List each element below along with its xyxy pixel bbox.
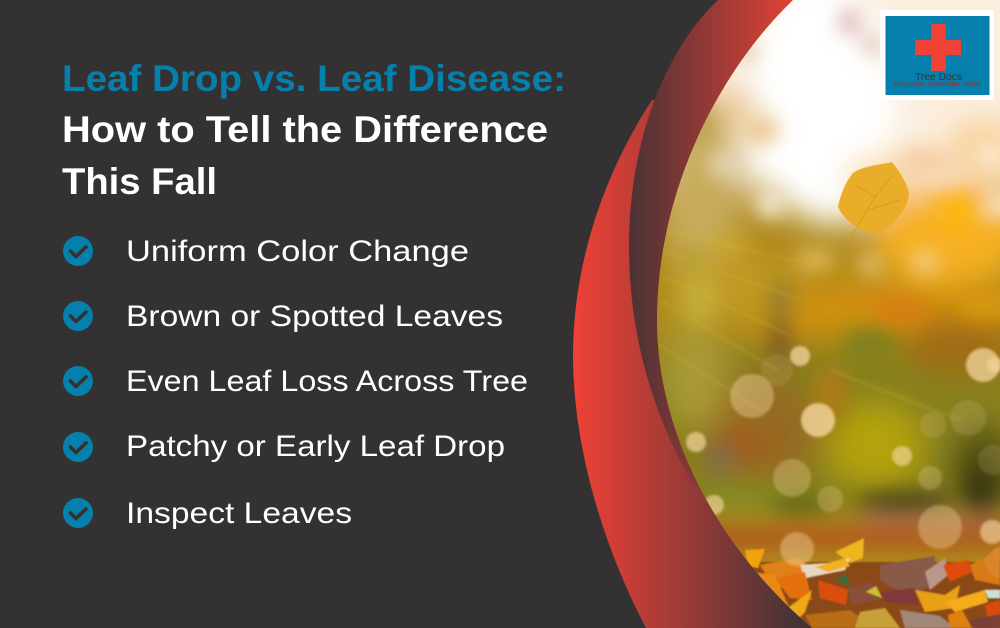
logo tagline: Diagnose. Prescribe. Treat. bbox=[894, 82, 981, 88]
title: This Fall bbox=[62, 161, 217, 202]
ground leaves bbox=[740, 538, 1000, 628]
item: Uniform Color Change: Uniform Color Change bbox=[126, 235, 469, 268]
title: How to Tell the Difference bbox=[62, 109, 548, 150]
item: Patchy or Early Leaf Drop: Patchy or Early Leaf Drop bbox=[126, 430, 505, 463]
icon: red medical cross bbox=[915, 24, 961, 71]
checklist bbox=[63, 235, 528, 530]
icon: falling leaf bbox=[838, 162, 909, 238]
logo name: Tree Docs bbox=[915, 72, 962, 83]
item: Even Leaf Loss Across Tree: Even Leaf Loss Across Tree bbox=[126, 365, 528, 398]
item: Brown or Spotted Leaves: Brown or Spotted Leaves bbox=[126, 300, 503, 333]
title bbox=[62, 58, 566, 202]
red curved swoosh bbox=[573, 100, 812, 628]
bokeh lights bbox=[686, 346, 1000, 566]
item: Inspect Leaves bbox=[63, 497, 352, 530]
photo: autumn forest with falling leaf bbox=[640, 0, 1000, 628]
title: Leaf Drop vs. Leaf Disease: bbox=[62, 58, 566, 99]
sun rays bbox=[756, 326, 958, 420]
dark red curved swoosh bbox=[629, 0, 1000, 487]
logo: Tree Docs bbox=[880, 10, 994, 100]
item: Inspect Leaves: Inspect Leaves bbox=[126, 497, 352, 530]
